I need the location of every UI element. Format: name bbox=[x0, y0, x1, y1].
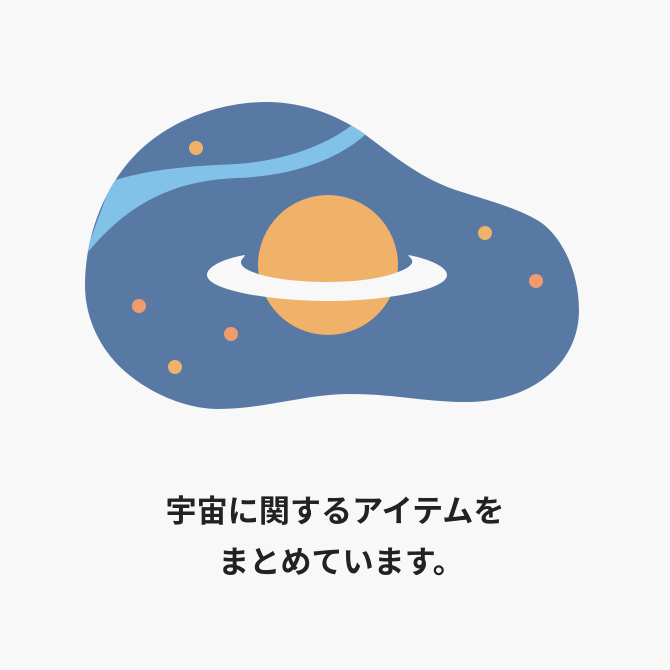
planet ring bbox=[207, 255, 447, 301]
caption text bbox=[166, 494, 504, 580]
light blue stream bbox=[84, 125, 366, 257]
star bbox=[189, 141, 203, 155]
star bbox=[168, 360, 182, 374]
star bbox=[529, 274, 543, 288]
illustration: space blob with planet bbox=[85, 102, 579, 409]
caption text: 宇宙に関するアイテムを bbox=[166, 494, 504, 529]
caption text: まとめています。 bbox=[218, 545, 464, 580]
star bbox=[478, 226, 492, 240]
star bbox=[132, 299, 146, 313]
star bbox=[224, 327, 238, 341]
planet bbox=[258, 195, 398, 335]
blob background bbox=[85, 102, 579, 409]
